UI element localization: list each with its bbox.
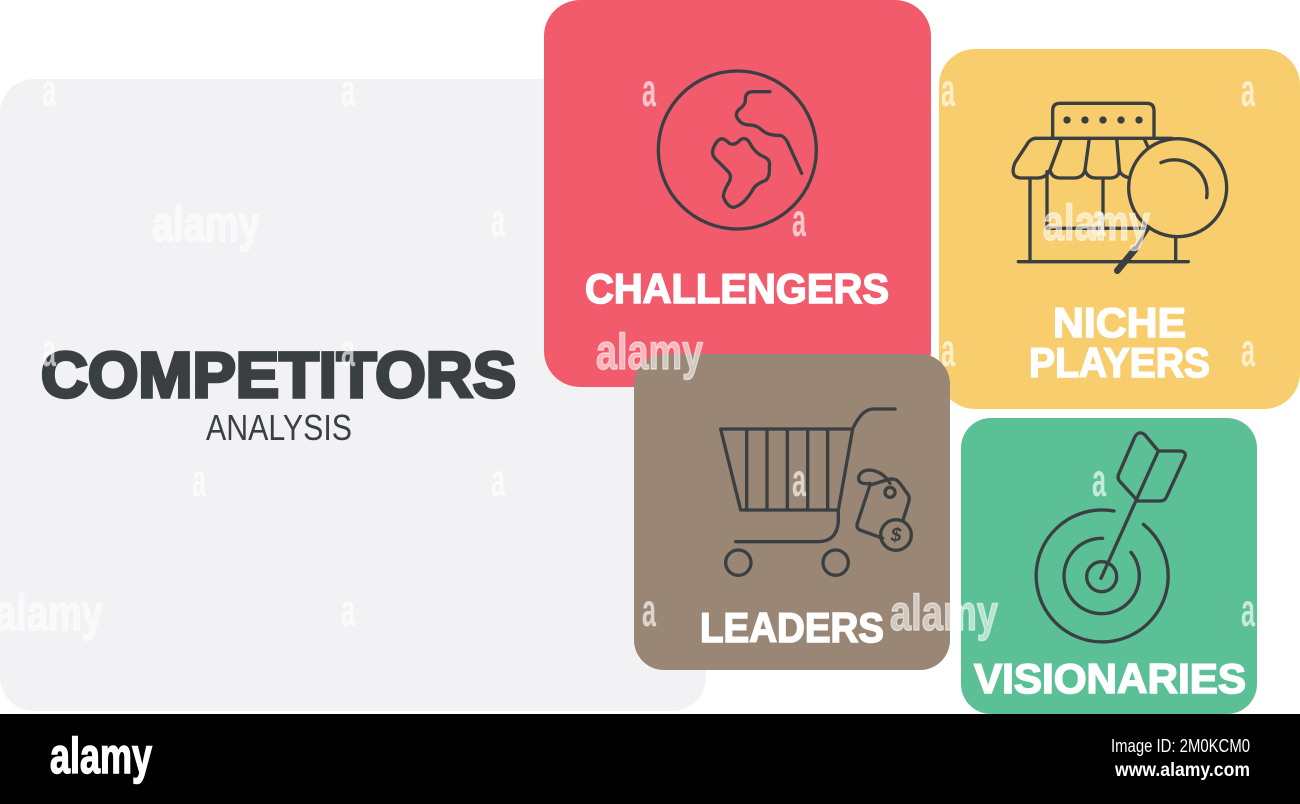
image id: Image ID: 2M0KCM0 (1111, 736, 1250, 756)
footer bar (0, 714, 1300, 804)
watermarks: alamy (890, 585, 998, 641)
label: niche: NICHE (1053, 299, 1186, 346)
panel: leaders (634, 354, 950, 670)
watermarks: a (341, 324, 355, 376)
panel: competitors analysis (0, 79, 706, 711)
watermarks: a (42, 64, 56, 116)
watermarks: a (341, 64, 355, 116)
label: players: PLAYERS (1029, 339, 1210, 386)
watermarks: a (642, 584, 656, 636)
watermarks: a (941, 64, 955, 116)
label: challengers: CHALLENGERS (585, 265, 889, 312)
panel: challengers (544, 0, 931, 387)
title: competitors: COMPETITORS (41, 339, 516, 411)
subtitle: analysis: ANALYSIS (206, 407, 352, 448)
icon: store with magnifier (1013, 103, 1227, 271)
watermarks (0, 64, 1255, 641)
label: leaders: LEADERS (700, 604, 884, 651)
label: visionaries: VISIONARIES (974, 655, 1246, 702)
watermarks: a (792, 194, 806, 246)
watermarks: alamy (1043, 195, 1150, 251)
watermarks: a (491, 194, 505, 246)
watermarks: a (941, 324, 955, 376)
watermarks: alamy (152, 196, 260, 252)
footer logo: alamy (50, 728, 152, 784)
watermarks: a (42, 324, 56, 376)
watermarks: a (1241, 324, 1255, 376)
watermarks: a (1092, 454, 1106, 506)
watermarks: a (642, 64, 656, 116)
watermarks: a (1092, 194, 1106, 246)
icon: shopping cart with price tag (721, 409, 911, 575)
watermarks: a (792, 454, 806, 506)
icon: target with arrow (1036, 433, 1185, 642)
icon: globe (658, 71, 816, 229)
watermarks: a (341, 584, 355, 636)
watermarks: alamy (596, 324, 703, 380)
panel: niche players (939, 49, 1300, 409)
icon: shopping cart with price tag: $ (890, 526, 902, 547)
watermarks: a (1241, 584, 1255, 636)
panel: visionaries (961, 418, 1257, 714)
watermarks: a (491, 454, 505, 506)
watermarks: a (192, 454, 206, 506)
website: www.alamy.com (1114, 760, 1250, 781)
watermarks: a (1241, 64, 1255, 116)
